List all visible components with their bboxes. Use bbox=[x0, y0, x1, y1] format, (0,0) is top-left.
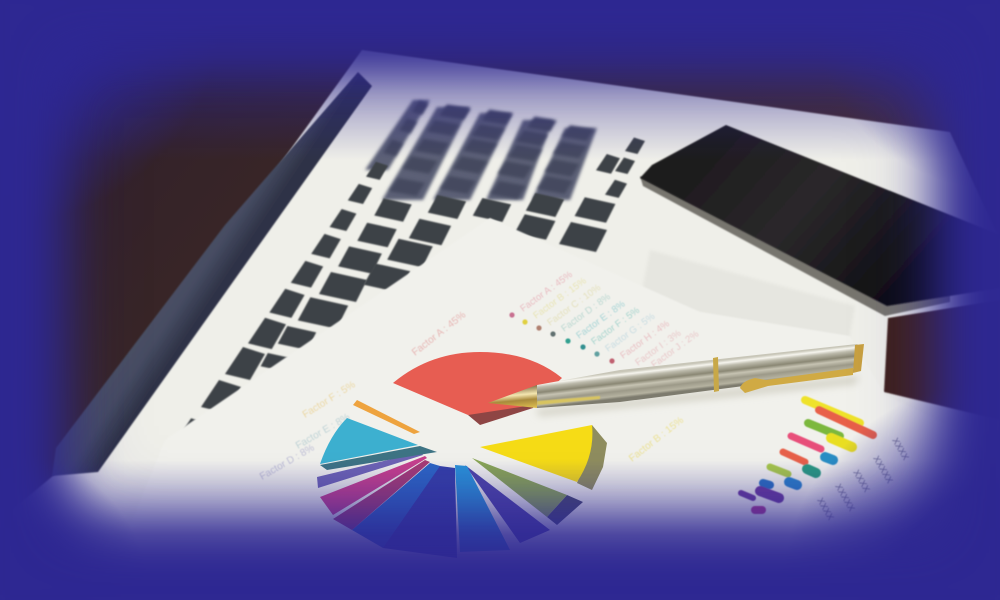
bar labels: XXXXX bbox=[833, 482, 857, 513]
magenta slice bbox=[320, 456, 427, 515]
light blue slice bbox=[455, 465, 510, 552]
pen gold band bbox=[713, 357, 719, 392]
legend labels: Factor I : 3% bbox=[633, 328, 684, 368]
bar labels: XXXX bbox=[815, 496, 836, 522]
key row 4 bbox=[473, 198, 511, 222]
teal slice side bbox=[320, 446, 437, 470]
legend labels: Factor B : 15% bbox=[531, 275, 589, 321]
orange slice bbox=[353, 400, 420, 434]
green slice side bbox=[547, 495, 583, 525]
keyboard bbox=[183, 100, 645, 433]
bar labels: XXXX bbox=[851, 468, 872, 494]
pie labels: Factor E : 8% bbox=[294, 412, 352, 452]
pen barrel bbox=[537, 344, 863, 408]
teal slice bbox=[320, 418, 418, 464]
pen shadow bbox=[535, 376, 860, 416]
legend labels: Factor F : 5% bbox=[589, 305, 642, 347]
legend bbox=[509, 269, 701, 370]
legend labels: Factor D : 8% bbox=[559, 291, 613, 334]
bar chart bbox=[741, 400, 911, 522]
pie labels: Factor D : 8% bbox=[258, 442, 317, 483]
bar labels: XXXXX bbox=[871, 454, 895, 485]
bar labels bbox=[815, 436, 911, 522]
bar labels: XXXX bbox=[890, 436, 911, 462]
dark blue slice bbox=[383, 465, 457, 558]
green slice bbox=[472, 458, 567, 517]
upper keys, out of focus bbox=[383, 101, 594, 199]
mid blue slice bbox=[352, 463, 440, 548]
purple slice bbox=[465, 465, 550, 543]
dark object under phone bbox=[884, 300, 1000, 420]
legend labels: Factor C : 10% bbox=[545, 282, 603, 328]
pie labels bbox=[258, 310, 686, 483]
bars bbox=[741, 400, 873, 510]
yellow slice side bbox=[577, 425, 607, 490]
phone screen bbox=[640, 125, 1000, 306]
legend labels: Factor A : 45% bbox=[518, 269, 575, 314]
key row 2 bbox=[261, 198, 412, 371]
legend labels bbox=[518, 269, 701, 370]
pen tip cone bbox=[488, 385, 537, 408]
phone side edge bbox=[640, 176, 950, 316]
pen end cap bbox=[853, 344, 864, 373]
laptop hinge bbox=[52, 72, 372, 476]
pen bbox=[488, 344, 864, 416]
legend dots bbox=[509, 312, 615, 364]
pie chart bbox=[258, 310, 686, 558]
pie labels: Factor A : 45% bbox=[410, 310, 468, 358]
legend labels: Factor E : 8% bbox=[574, 298, 628, 341]
maroon slice bbox=[333, 460, 430, 530]
phone bbox=[640, 125, 1000, 316]
pen reflection bbox=[537, 396, 600, 405]
paper sheet bbox=[100, 218, 1000, 600]
pen clip bbox=[740, 368, 853, 393]
thin purple slice bbox=[317, 452, 423, 488]
red slice side bbox=[468, 385, 550, 425]
yellow slice bbox=[480, 425, 592, 482]
key row 3 bbox=[364, 195, 466, 293]
pie labels: Factor F : 5% bbox=[301, 379, 358, 421]
key row 5 bbox=[515, 193, 564, 240]
legend labels: Factor G : 5% bbox=[603, 311, 658, 354]
trackpad bbox=[640, 250, 855, 345]
red slice bbox=[393, 352, 562, 415]
pie labels: Factor B : 15% bbox=[627, 415, 686, 464]
legend labels: Factor H : 4% bbox=[618, 318, 672, 361]
legend labels: Factor J : 2% bbox=[649, 328, 701, 370]
right hand keys bbox=[559, 138, 645, 252]
upper key columns bbox=[365, 100, 597, 200]
key row 1 bbox=[183, 162, 388, 433]
